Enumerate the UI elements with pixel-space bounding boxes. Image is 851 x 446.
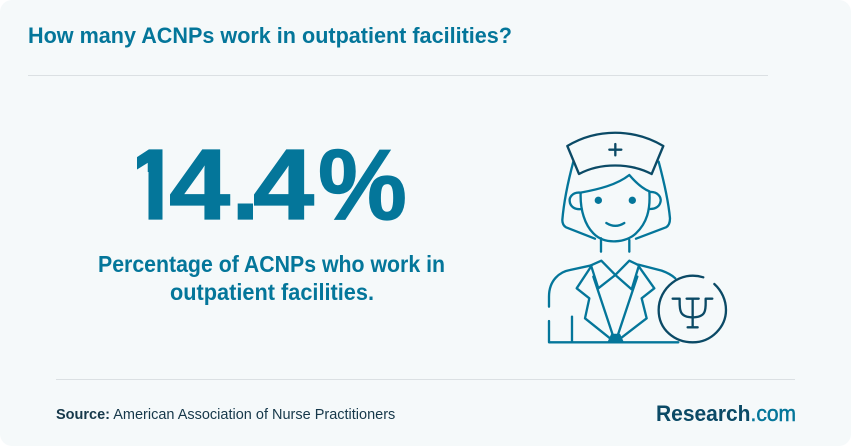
- statistic description: outpatient facilities.: [170, 279, 374, 305]
- big statistic: 4: [169, 130, 230, 241]
- big statistic: 1: [125, 129, 181, 241]
- statistic description: [98, 251, 445, 305]
- nurse hair and face: [562, 162, 670, 252]
- big statistic: 4: [253, 130, 314, 241]
- big statistic: .: [232, 129, 259, 241]
- big statistic: [137, 148, 405, 221]
- nurse cap: [567, 133, 663, 174]
- statistic description: Percentage of ACNPs who work in: [98, 251, 445, 277]
- big statistic: %: [318, 129, 407, 241]
- source note: Source: American Association of Nurse Practitioners: [56, 407, 395, 423]
- logo: Research.com: Research.com: [656, 401, 796, 426]
- icon: nurse with psychology symbol: [549, 133, 726, 342]
- psychology badge: [659, 276, 726, 342]
- title: How many ACNPs work in outpatient facilities?: [28, 23, 512, 48]
- nurse uniform: [549, 261, 678, 342]
